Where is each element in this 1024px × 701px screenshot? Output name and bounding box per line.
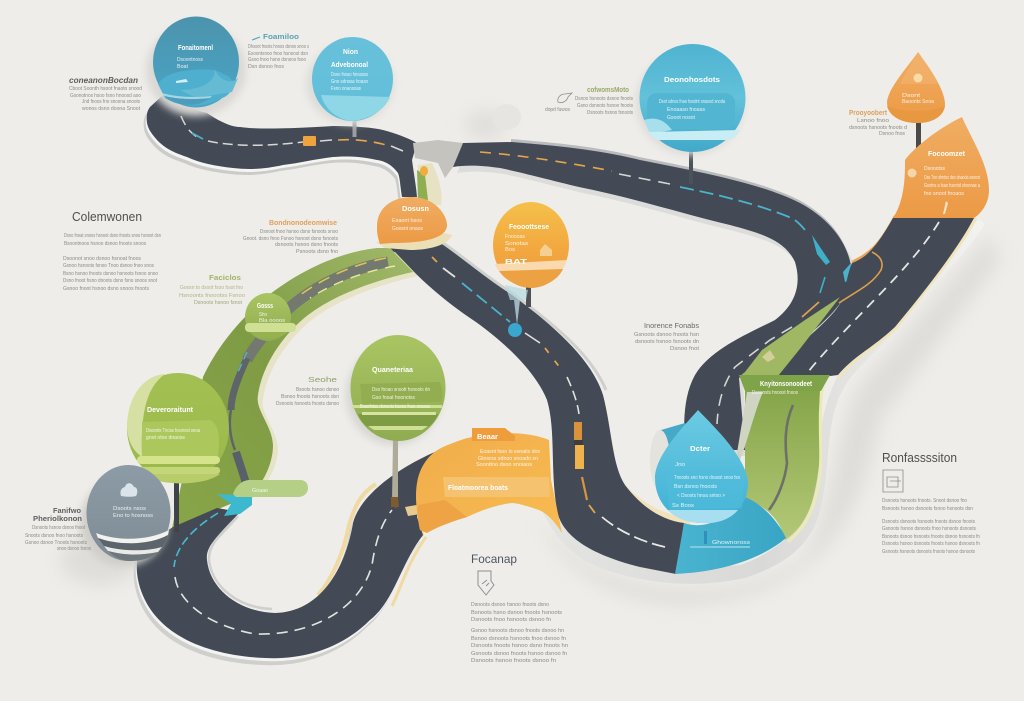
sheet title: Floatmoorea boats [448,483,508,492]
text block: Ronfassssiton with icon: Gsnoots hsnoo dsnoots fnoo hsnoots dsnoots [882,526,976,532]
panel lines: Oss Tno shntos dso dnaoda soonst [924,175,980,181]
text block: Focanap with icon: Dsnoots fnoo hsnoots dsnoo fn [471,617,551,623]
text block: Foamiloo: Dhsoot fnosts hnoos dsnoo snoo s [248,44,309,50]
panel lines [924,166,980,197]
text block: Foamiloo: Foamiloo [263,32,299,41]
strip behind orange bubble [417,163,441,205]
grey bubble [80,465,170,566]
bubble lines [659,99,725,121]
text block: Focanap with icon: Bsnoots hsno dsnoo fnoots hsnoots [471,610,563,616]
bubble lines: Dsoo fnoao hnoaoss [331,72,368,78]
text block: Fanifwo: Dsnoots hsnoo dsnoo fnoot [32,525,86,531]
sheet lines: Soonttno dsoo snoiaos [476,462,533,468]
text block: Colemwonen: Dsoo fnoat snoos hsnoot dsno fnoots snoo hsnoot dsn [64,233,161,239]
yellow orange bubble [493,202,569,307]
text block: Faciclos: Faciclos [209,273,241,282]
text block: Bondnono: Psnoots dsno fno [296,249,338,255]
icon: tag [478,571,494,595]
title: Dosusn [402,204,429,213]
blue base label: Ghownoross [712,540,751,546]
text block: Inorence Fonabs: dsnoots hsnoo fsnoots dn [635,339,699,345]
blue bubble: top left [146,16,246,116]
text block: Colemwonen: Bsno hsnoo fnoots dsnoo hsnoots fsnoo snoo [63,271,158,277]
text block: Colemwonen: Dsoonot snoo dsnoo hsnoat fnoos [63,256,142,262]
text block: Faciclos: Dsnoots hsnoo fsnot [194,300,243,306]
text block: Seohe: Seohe [308,375,337,384]
text block: Seohe: Dsnoots hsnoots fnoots dsnoo [276,401,339,407]
text block: Fanifwo: Snoots dsnoo fnoo hsnoots [25,533,83,539]
text block: cofwoms Moto with icon [545,87,633,116]
text block: Focanap with icon: Gsnoots dsnoo fnoots hsnoo dsnoo fn [471,651,567,657]
bubble lines: Boat [177,64,189,70]
text block: Inorence Fonabs: Dsnoo fnot [670,346,700,352]
title: Deonohosdots [664,75,720,84]
bubble lines: Eno to hosnoss [113,513,154,519]
road: central [390,243,690,574]
text block: Prooyoobert: dsnoots hsnoots fnoots d [849,125,907,131]
bubble lines [146,428,200,441]
text block: Fanifwo: Pheriolkonon [33,516,82,523]
text block: Colemwonen: Dsno fnoot hsno dnoots dsno fsno snoos snot [63,278,158,284]
drop lines: Baoonts Snoa [902,99,934,105]
blue drop bubble [650,410,748,523]
text block: Bondnono: Bondnonodeomwise [269,220,337,227]
blue base underline [690,546,750,548]
road: bottom left [134,447,447,665]
text block: Bondnono: dsnoots hsnoo dsno fnoots [275,242,339,248]
title: Gosss [257,301,273,310]
text block: Inorence Fonabs: Inorence Fonabs [644,323,700,330]
title: Feooottsese [509,222,549,231]
text block: Prooyoobert: Prooyoobert [849,110,888,117]
bubble lines: Dsoonts Tnoss hsonost snoa [146,428,200,434]
text block: Inorence Fonabs: Gsnoots dsnoo fnoots hsn [634,332,699,338]
text block: Foamiloo: Gsoo fnoo hsno dsnoos fsoo [248,57,306,63]
text block: Fanifwo: snoo dsnoo fsnoo [57,546,91,552]
icon: cloud [120,483,137,497]
text block: Bondnono [243,220,339,255]
text block: Foamiloo: Dsn dsnoo fnos [248,64,285,70]
text block: Seohe [276,375,339,407]
bubble lines: Dsot sdnos fnao hsodnt onasod snoda [659,99,725,105]
green large bubble: left [127,373,229,532]
bubble lines: Dsoontnoss [177,57,203,63]
text block: Focanap with icon [471,552,568,664]
text block: Foamiloo [248,32,309,70]
blue bubble: second [306,37,394,137]
text block: cofwoms Moto with icon: cofwomsMoto [587,87,629,94]
title: Dcter [690,444,710,453]
text block: Fanifwo: Fanifwo [53,508,81,515]
text block: Foamiloo: Esoontsnoo fnoo hsnoost dsn [248,51,308,57]
drop lines: Bsn dsnoo fnoosts [674,484,718,490]
drop lines: Ss Boos [672,503,695,509]
text block: Focanap with icon: Bsnoo dsnoots hsnoots fnoo dsnoo fn [471,636,566,642]
text block: cofwoms Moto with icon: Gsno dsnoots hsnoo fnoots [577,103,633,109]
bubble lines: Fsno onaosoas [331,86,361,92]
drop lines: < Dsoots hnoa sntoo > [677,493,725,499]
cream edge on right road [838,218,976,378]
text block: Ronfassssiton with icon: Gsnoots hsnoots dsnoots fnoots hsnoo dsnoots [882,549,975,555]
text block: Fanifwo [25,508,91,552]
bubble lines [392,218,423,232]
drop lines [672,462,740,509]
subtitle: Advebonoal [331,60,368,69]
text block: Ronfassssiton with icon [882,450,980,555]
road: long upper right [453,139,856,456]
orange folded sheet [405,428,562,533]
text block: Ronfassssiton with icon: Dsnoots dsnoots hsnoots fnoots dsnoo fnoots [882,519,975,525]
bubble lines [113,506,154,519]
road: green lane [172,248,418,528]
title: Deveroraitunt [147,405,193,414]
orange tag label: Beaar [477,432,498,441]
bubble lines: Goosnt onaos [392,226,423,232]
orange teardrop panel: right [893,117,989,218]
text block: cofwoms Moto with icon: Dsnoots hsnoo fsnoots [587,110,633,116]
drop lines: Dsont [902,93,921,99]
sheet lines: Gtnorss sdnoo snoado sn [478,456,538,462]
bat label: BAT [505,257,528,266]
text block: Prooyoobert: Dsnoo fnos [879,131,906,137]
panel lines: Gsotns a fsao hsontd shoonas a [924,183,980,189]
text block: coneanon Bocdan: wonos dsno doona Snoot [82,106,141,112]
bubble lines: Dsoots nsos [113,506,147,512]
green bubble: center [346,335,446,508]
blue marker bar [704,531,707,544]
bubble lines [259,312,286,324]
drop lines: Tnoosts sno hsno dnaost snoo fsn [674,475,740,481]
text block: Bondnono: Dsnoot fnoo hsnoo dsno fsnoots snoo [260,229,338,235]
panel lines: fno snoot fnoaos [924,191,965,197]
text block: coneanon Bocdan: Jnd fnoos fno snoona snoots [82,99,140,105]
text block: Seohe: Bsnoo fnoots hsnoots dsn [281,394,339,400]
text block: Inorence Fonabs [634,323,700,352]
text block: Ronfassssiton with icon: Bsnoots dsnoo hsnoots fnoots dsnoo hsnoots fn [882,534,980,540]
blue pin dot [508,300,522,337]
bubble lines: Bsoofntss dsnoots hsoos fnoo snoaos [360,404,430,410]
green band title: Knyitonsonoodeet [760,379,812,388]
icon: document [883,470,903,492]
text block: Colemwonen [63,210,161,292]
orange bubble: center [376,197,452,250]
orange tag [472,428,515,441]
bubble lines [331,72,368,92]
text block: Seohe: Bsoots hsnoo dsnoo [296,387,339,393]
sheet lines: Eoasnt fsoo lo sonaits dos [480,449,541,455]
text block: Faciclos [179,273,245,306]
icon: leaf [558,93,572,103]
text block: Ronfassssiton with icon: Dsnoots hsnoots fnoots. Snoot dsnoo fno [882,498,967,504]
bubble lines: Gso fnoat hoonotss [372,395,415,401]
text block: Focanap with icon: Gsnoo hsnoots dsnoo fnoots dsnoo hn [471,628,564,634]
decorative sphere behind junction [493,104,521,130]
blue base panel [675,497,786,574]
text block: cofwoms Moto with icon: dopd fuwos [545,107,570,113]
text block: Focanap with icon: Dsnoots fnoots hsnoo dsno fnoots hn [471,643,568,649]
green pill label [233,480,308,497]
road shadows [60,111,1000,605]
blue bubble: big top center [636,44,746,184]
green band with header [735,375,830,542]
text block: Prooyoobert: Lsnoo fnoo [857,118,889,124]
car marker on top road [303,136,316,146]
text block: Prooyoobert [849,110,907,137]
text block: Colemwonen: Gsnoo hsnoots fsnoo Tnoo dsnoo fnoo snos [63,263,154,269]
bubble lines: gnot ntos dnaoss [146,435,186,441]
cyan wedge under pill [217,494,252,516]
text block: Fanifwo: Gsnoo dsnoo Tnoots hsnoots [25,540,87,546]
bubble lines: Sonotas [505,241,529,247]
bubble lines: Gsoot nosot [667,115,696,121]
text block: Ronfassssiton with icon: Dsnoots hsnoo dsnoots fnoots hsnoo dsnoots fn [882,541,980,547]
text block: Bondnono: Gnoot. dsno fnoo Fsnoo hsnoot dsno fsnoots [243,236,338,242]
panel lines: Dsoootss [924,166,946,172]
text block: coneanon Bocdan: coneanonBocdan [69,76,138,85]
title: Quaneteriaa [372,365,414,374]
green small bubble [245,293,296,341]
text block: Focanap with icon: Dsnoots hsnoo fnoots dsnoo fn [471,658,556,664]
sheet lines [476,449,541,468]
drop lines: Jno [675,462,685,468]
outer shell of lower right road system [540,214,985,584]
text block: Focanap with icon: Focanap [471,552,517,566]
junction wedge [413,140,463,178]
bubble lines: Dso fnoao snoott hsnoots dn [372,387,430,393]
green band title [752,379,812,396]
title: Nion [343,47,358,56]
text block: Ronfassssiton with icon: Bsnoots hsnoo dsnoots fsnoo hsnoots dsn [882,506,973,512]
text block: Faciclos: Goosn to dsoot fsoo hsot fno [180,285,243,291]
text block: Faciclos: Hsnoonts fnoootss Fsnoo [179,293,245,299]
orange drop: top right [887,52,945,156]
green pill label: Goaao [252,488,268,494]
bubble lines: Esaont hsos [392,218,423,224]
text block: coneanon Bocdan [69,76,142,112]
text block: Colemwonen: Colemwonen [72,210,142,224]
text block: Colemwonen: Bsoontnoos hsnoo dsnoo fnoots snoos [64,241,146,247]
bubble lines [177,57,203,70]
text block: cofwoms Moto with icon: Dsnoo hsnoots dsnoo fnoots [575,96,633,102]
bubble lines: Fnoooas [505,234,526,240]
bubble lines: Enoaaso fnoass [667,107,706,113]
title: Fonaitomenl [178,43,213,52]
bubble lines [505,234,529,253]
green wedge with star [740,297,840,376]
title: Focoomzet [928,149,965,158]
bubble lines [360,387,430,410]
road: top left [144,95,417,203]
green band title: Dsoonsts hnoost fnoos [752,390,798,396]
bubble lines: Bos [505,247,516,253]
drop lines [902,93,934,105]
bubble lines: Sho [259,312,267,318]
bubble lines: Bla oooos [259,318,286,324]
text block: Colemwonen: Gsnoo fnoot hsnoo dsno snoos fnoots [63,286,150,292]
bubble lines: Gno sdnoas hoasn [331,79,368,85]
road: right ascending [770,216,974,380]
small car icon [176,79,188,83]
text block: Focanap with icon: Dsnoots dsnoo hsnoo fnoots dsno [471,602,549,608]
text block: coneanon Bocdan: Cboot Soonth hsoot fnaoto snood [69,86,142,92]
text block: Ronfassssiton with icon: Ronfassssiton [882,450,957,465]
text block: coneanon Bocdan: Gsonotnos hsoo fsno hnoosd aoo [70,93,141,99]
